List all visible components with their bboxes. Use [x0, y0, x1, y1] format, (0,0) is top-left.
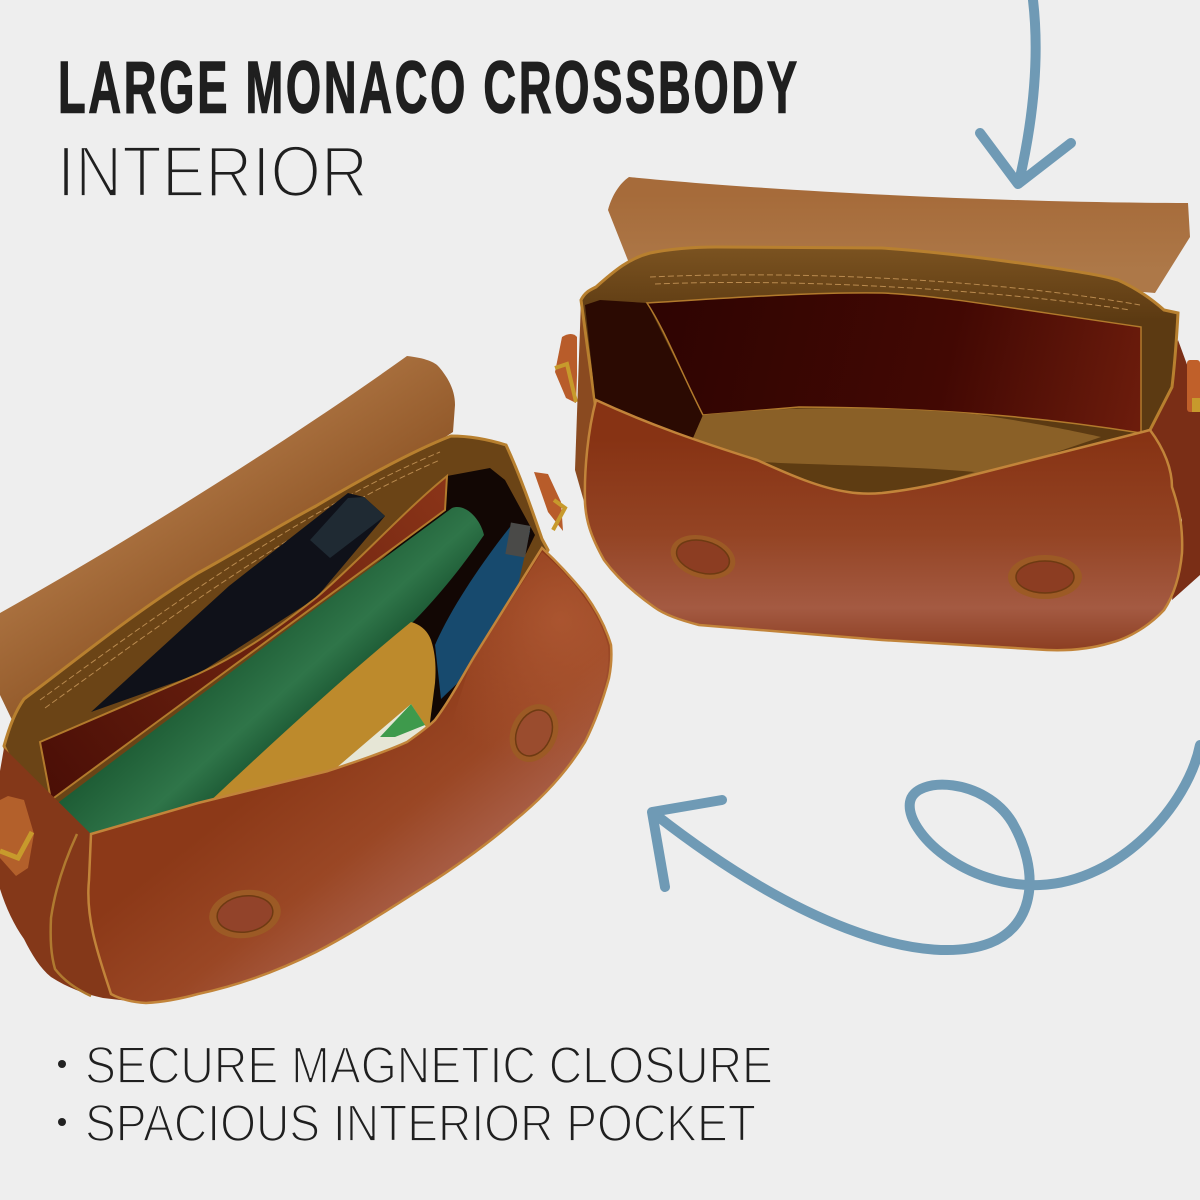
- suede flap: [608, 177, 1190, 293]
- feature: closure: SECURE MAGNETIC CLOSURE: [85, 1037, 773, 1095]
- dark cavity: [60, 468, 535, 830]
- side panel left: [0, 748, 146, 1003]
- bullet: [58, 1118, 66, 1126]
- interior base: [690, 408, 1101, 500]
- zip pull: [505, 523, 531, 557]
- blue pouch: [435, 527, 530, 699]
- phone: [91, 493, 385, 712]
- bullet: [58, 1060, 66, 1068]
- card green print: [380, 704, 425, 737]
- wall stitching: [40, 452, 440, 708]
- strap tab left: [0, 796, 34, 876]
- side panel right: [1150, 340, 1200, 600]
- front leather panel: [88, 548, 611, 1003]
- side strap tab left: [555, 334, 577, 403]
- interior base shadow: [765, 462, 975, 495]
- feature: pocket: SPACIOUS INTERIOR POCKET: [85, 1095, 756, 1153]
- suede flap: [0, 356, 455, 720]
- title line: product name: LARGE MONACO CROSSBODY: [58, 46, 797, 128]
- arrow: looped arrow pointing to left bag: [652, 745, 1200, 950]
- interior lining: [581, 247, 1178, 505]
- left bag: filled with phone, notebook and pouches: [0, 356, 611, 1003]
- printed card: [328, 704, 428, 775]
- magnetic snap bottom: [206, 885, 284, 943]
- inner dark left corner: [585, 300, 703, 445]
- side strap tab right: [1187, 360, 1200, 412]
- title line: interior: INTERIOR: [57, 132, 368, 212]
- wall stitching: [650, 275, 1140, 310]
- side seam: [51, 834, 91, 996]
- feature list: [58, 1037, 773, 1153]
- title: [57, 46, 797, 212]
- magnetic snap top: [500, 696, 568, 770]
- interior lining: [4, 436, 548, 845]
- magnetic snap left: [666, 528, 740, 586]
- magnetic snap right: [1008, 555, 1082, 599]
- strap tab right: [534, 472, 565, 531]
- right bag: empty, showing interior pocket: [555, 177, 1200, 650]
- notebook: [55, 507, 484, 835]
- mustard pouch: [206, 622, 436, 805]
- pocket: [647, 293, 1141, 433]
- phone camera block: [310, 497, 385, 558]
- front leather panel: [585, 400, 1182, 650]
- brass ring: [0, 832, 32, 858]
- arrow: top curved arrow pointing to right bag: [980, 0, 1071, 184]
- side panel left: [575, 300, 596, 505]
- pocket: [40, 476, 447, 800]
